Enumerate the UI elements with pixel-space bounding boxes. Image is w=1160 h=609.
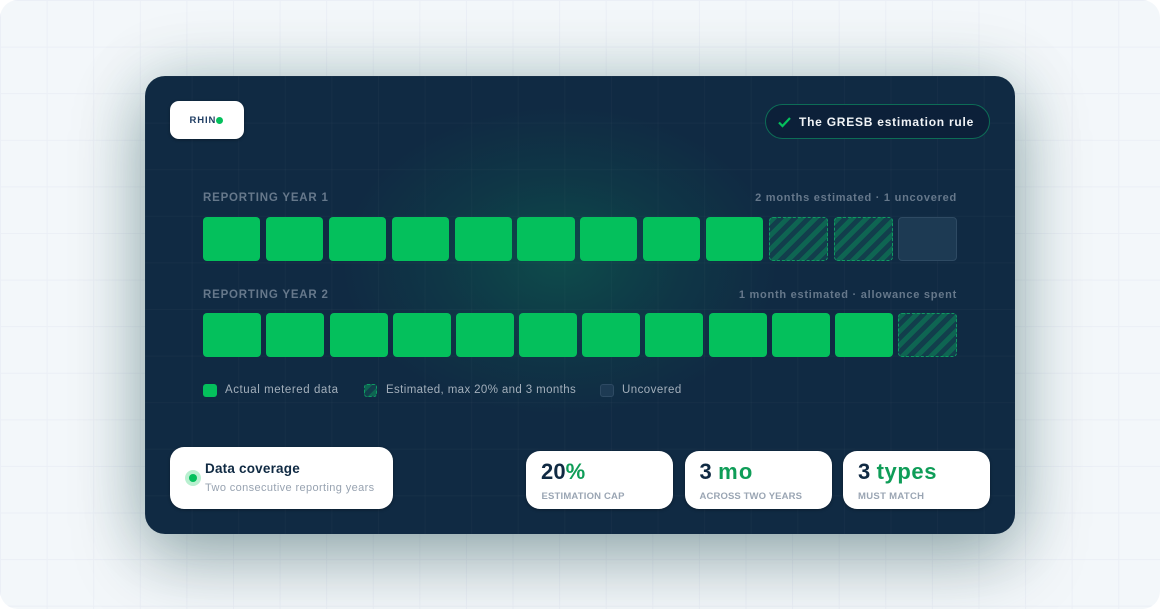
badge: The GRESB estimation rule <box>765 104 990 138</box>
legend <box>203 384 682 397</box>
legend swatch: uncovered <box>600 384 614 397</box>
caption: MUST MATCH <box>858 490 924 502</box>
icon: check mark <box>778 117 791 128</box>
value: 3 mo <box>700 458 753 484</box>
legend swatch: actual <box>203 384 216 397</box>
legend swatch: estimated <box>364 384 377 397</box>
year 1 note: 2 months estimated · 1 uncovered <box>755 192 957 204</box>
panel: main dark card <box>145 76 1015 534</box>
value: 3 types <box>858 458 937 484</box>
year 1 label: REPORTING YEAR 1 <box>203 192 329 204</box>
legend text: estimated: Estimated, max 20% and 3 months <box>386 384 576 396</box>
stat: must match <box>843 450 990 508</box>
row: reporting year 2 <box>203 288 957 357</box>
row: reporting year 1 <box>203 192 957 261</box>
caption: ESTIMATION CAP <box>542 490 625 502</box>
year 2 note: 1 month estimated · allowance spent <box>739 289 957 301</box>
subtext: Two consecutive reporting years <box>205 482 375 494</box>
badge text: The GRESB estimation rule <box>799 114 974 128</box>
legend text: actual: Actual metered data <box>225 384 339 396</box>
year 2 label: REPORTING YEAR 2 <box>203 288 329 300</box>
logo text: RHIN <box>190 114 216 126</box>
value: 20% <box>541 458 585 484</box>
stat: across two years <box>684 450 832 508</box>
logo: RHINO badge <box>170 100 244 139</box>
stat: estimation cap <box>526 450 673 508</box>
panel: data coverage <box>170 447 393 508</box>
caption: ACROSS TWO YEARS <box>700 490 802 502</box>
legend text: uncovered: Uncovered <box>622 384 682 396</box>
heading: Data coverage <box>205 461 300 476</box>
icon: status dot <box>185 470 201 486</box>
logo dot <box>216 116 223 124</box>
